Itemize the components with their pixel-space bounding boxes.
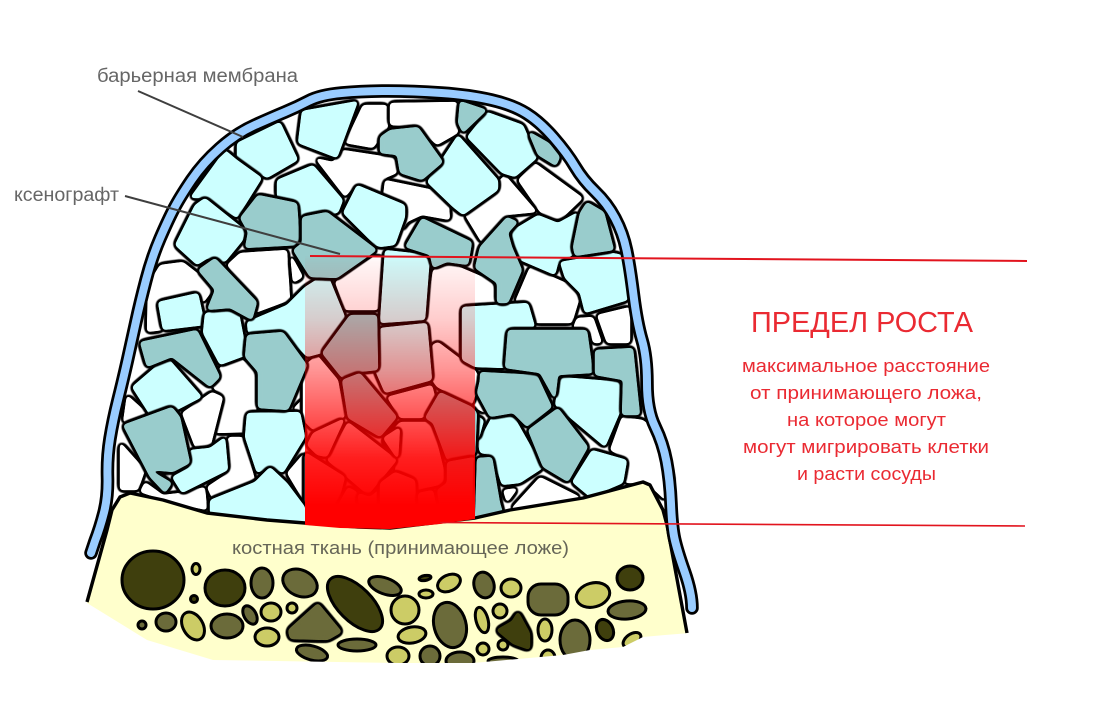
label: xenograft: ксенографт xyxy=(14,185,119,206)
leader line: xenograft xyxy=(125,196,340,254)
leader line: membrane xyxy=(138,91,243,137)
dark marrow spaces xyxy=(122,551,643,643)
red gradient zone xyxy=(305,255,475,529)
label: bone tissue: костная ткань (принимающее ложе) xyxy=(232,537,569,558)
torn lower edge mask xyxy=(60,600,720,717)
angular marrow spaces xyxy=(288,603,530,650)
white granules xyxy=(120,102,673,530)
cyan granules xyxy=(132,101,628,524)
lower limit red line xyxy=(440,522,1025,526)
description text: от принимающего ложа, xyxy=(750,382,982,403)
upper limit red line xyxy=(310,256,1027,261)
description text xyxy=(742,355,990,484)
description text: на которое могут xyxy=(787,409,947,430)
heading: growth limit: ПРЕДЕЛ РОСТА xyxy=(751,307,974,339)
xenograft granules xyxy=(120,101,673,530)
description text: максимальное расстояние xyxy=(742,355,990,376)
bone marrow spaces xyxy=(122,551,647,670)
medium marrow spaces xyxy=(138,564,647,670)
bone body xyxy=(80,482,700,665)
bone outline xyxy=(87,482,687,633)
label: barrier membrane: барьерная мембрана xyxy=(97,66,298,87)
description text: и расти сосуды xyxy=(797,463,936,484)
description text: могут мигрировать клетки xyxy=(743,436,989,457)
light marrow spaces xyxy=(177,564,644,666)
barrier membrane xyxy=(91,91,692,608)
teal granules xyxy=(123,101,640,524)
bone tissue xyxy=(60,482,720,717)
